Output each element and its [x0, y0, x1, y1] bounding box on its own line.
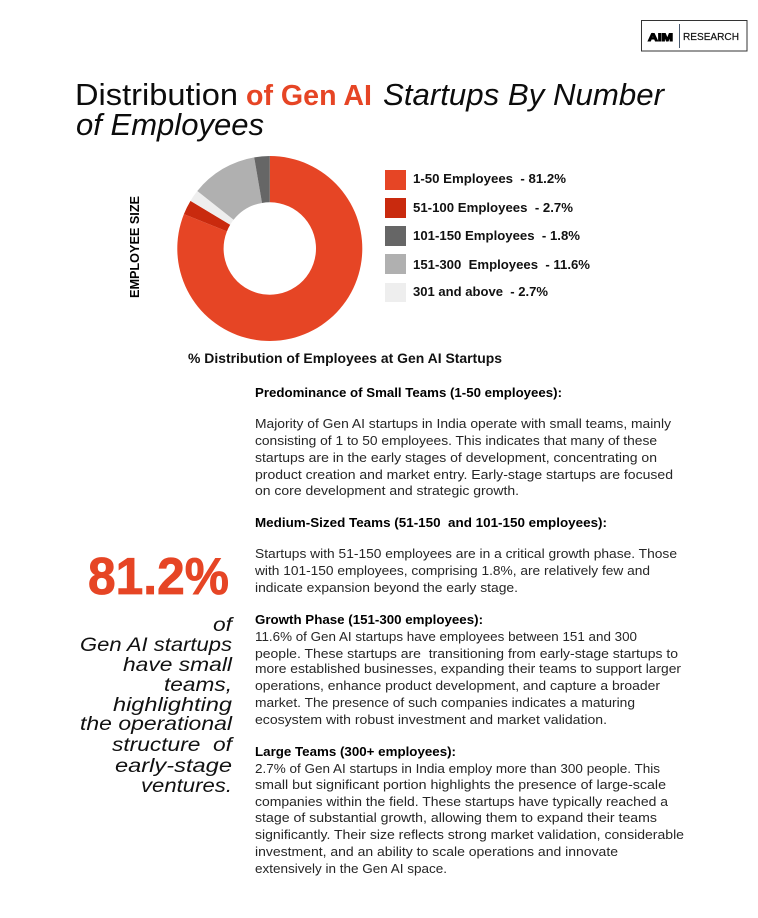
- legend item: 51-100 employees: [385, 198, 573, 218]
- logo: AIM Research: [642, 20, 747, 51]
- section body: operations, enhance product development, and capture a broader: [255, 678, 661, 693]
- section body: [255, 416, 673, 498]
- section: large teams: [255, 744, 684, 876]
- stat description: of: [213, 614, 235, 636]
- legend item: 101-150 employees: 101-150 Employees - 1.8%: [413, 229, 580, 243]
- big stat: 81.2%: [88, 548, 229, 606]
- section heading: Medium-Sized Teams (51-150 and 101-150 employees):: [255, 515, 607, 530]
- legend item: 151-300 employees: [385, 254, 590, 274]
- section body: with 101-150 employees, comprising 1.8%, are relatively few and: [254, 563, 650, 578]
- chart caption: % Distribution of Employees at Gen AI Startups: [188, 350, 502, 366]
- section heading: Growth Phase (151-300 employees):: [255, 612, 483, 627]
- section body: Majority of Gen AI startups in India operate with small teams, mainly: [255, 416, 672, 431]
- section body: indicate expansion beyond the early stage.: [255, 580, 518, 595]
- stat description: highlighting: [113, 694, 232, 716]
- slice: 1-50 employees: [177, 156, 362, 341]
- stat description: early-stage: [115, 755, 232, 777]
- stat description: [80, 614, 235, 797]
- stat description: ventures.: [141, 775, 232, 797]
- title: Distribution: [75, 77, 238, 112]
- legend item: 1-50 employees: 1-50 Employees - 81.2%: [413, 172, 566, 186]
- section body: 2.7% of Gen AI startups in India employ more than 300 people. This: [255, 761, 661, 776]
- section body: startups are in the early stages of development, concentrating on: [255, 450, 657, 465]
- logo: AIM Research: RESEARCH: [683, 31, 739, 43]
- stat description: Gen AI startups: [80, 634, 232, 656]
- legend item: 51-100 employees: 51-100 Employees - 2.7%: [413, 201, 573, 215]
- stat description: teams,: [164, 674, 232, 696]
- section body: Startups with 51-150 employees are in a critical growth phase. Those: [255, 546, 677, 561]
- legend item: 1-50 employees: [385, 170, 566, 190]
- section: predominance of small teams: [255, 385, 673, 498]
- stat description: structure of: [112, 734, 235, 756]
- section body: people. These startups are transitioning from early-stage startups to: [255, 646, 678, 661]
- section body: investment, and an ability to scale operations and innovate: [255, 844, 618, 859]
- legend item: 301 and above: 301 and above - 2.7%: [413, 285, 548, 299]
- section body: more established businesses, expanding their teams to support larger: [255, 661, 682, 676]
- section body: market. The presence of such companies indicates a maturing: [255, 695, 635, 710]
- title: Startups By Number: [383, 77, 666, 112]
- section body: [255, 629, 682, 727]
- axis label: employee size: EMPLOYEE SIZE: [127, 196, 142, 298]
- legend item: 151-300 employees: 151-300 Employees - 11.6%: [413, 258, 590, 272]
- section body: stage of substantial growth, allowing them to expand their teams: [255, 810, 658, 825]
- section: growth phase: [255, 612, 682, 727]
- section body: ecosystem with robust investment and market validation.: [255, 712, 607, 727]
- section body: 11.6% of Gen AI startups have employees between 151 and 300: [255, 629, 637, 644]
- logo: AIM Research: AIM: [648, 32, 673, 44]
- slice: 151-300 employees: [197, 157, 262, 220]
- section body: product creation and market entry. Early-stage startups are focused: [255, 467, 673, 482]
- legend item: 301 and above: [385, 283, 548, 302]
- section heading: Large Teams (300+ employees):: [255, 744, 456, 759]
- title: of Employees: [76, 107, 264, 142]
- section body: on core development and strategic growth.: [255, 483, 519, 498]
- section body: small but significant portion highlights the presence of large-scale: [255, 777, 666, 792]
- stat description: have small: [123, 654, 233, 676]
- section body: consisting of 1 to 50 employees. This indicates that many of these: [255, 433, 657, 448]
- donut chart: [177, 156, 362, 341]
- legend: [385, 170, 590, 302]
- section body: extensively in the Gen AI space.: [255, 861, 447, 876]
- slice: 51-100 employees: [184, 201, 230, 231]
- title: of Gen AI: [246, 80, 372, 112]
- section body: companies within the field. These startups have typically reached a: [255, 794, 669, 809]
- section: medium-sized teams: [254, 515, 677, 595]
- section body: significantly. Their size reflects strong market validation, considerable: [255, 827, 684, 842]
- slice: 301 and above: [191, 191, 234, 225]
- stat description: the operational: [80, 713, 233, 735]
- legend item: 101-150 employees: [385, 226, 580, 246]
- slice: 101-150 employees: [254, 156, 270, 203]
- section body: [254, 546, 677, 595]
- section body: [255, 761, 684, 876]
- title: [75, 77, 666, 142]
- section heading: Predominance of Small Teams (1-50 employees):: [255, 385, 562, 400]
